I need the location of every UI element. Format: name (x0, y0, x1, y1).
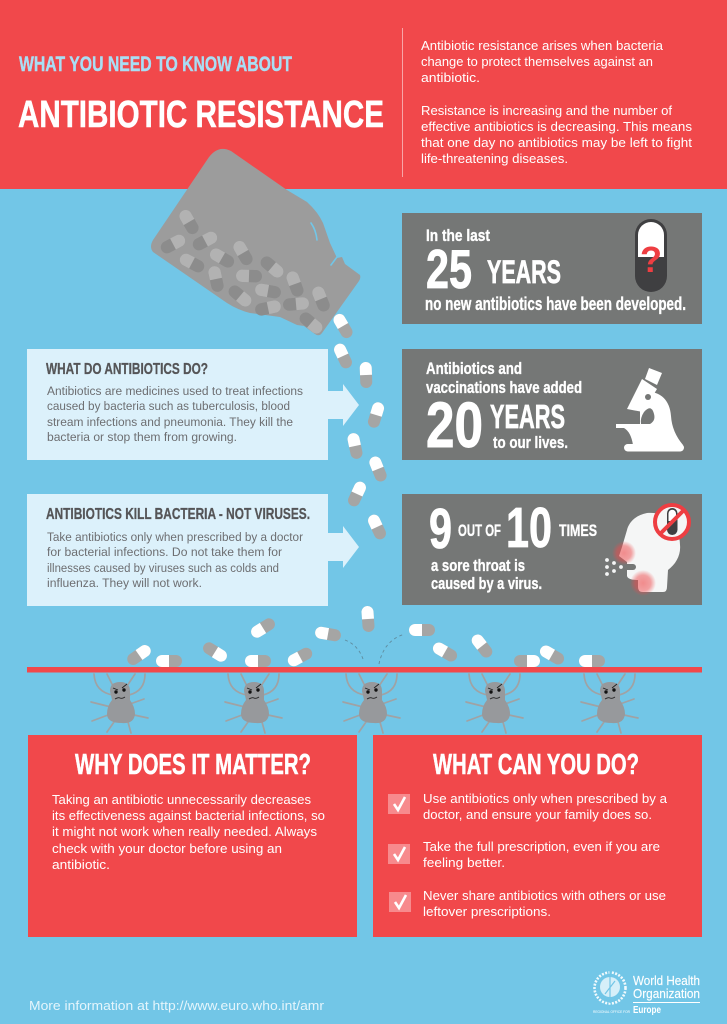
heading: ANTIBIOTICS KILL BACTERIA - NOT VIRUSES. (46, 506, 310, 523)
panel: antibiotics kill bacteria (27, 494, 359, 606)
header intro text (421, 38, 692, 166)
header intro text: antibiotic. (421, 70, 480, 85)
kicker heading: WHAT YOU NEED TO KNOW ABOUT (19, 53, 292, 76)
body text: Antibiotics are medicines used to treat infections (47, 384, 303, 398)
barrier bar (27, 667, 702, 672)
icon: head with sore throat (605, 505, 689, 596)
header intro text: life-threatening diseases. (421, 151, 568, 166)
header band (0, 0, 727, 189)
main title: ANTIBIOTIC RESISTANCE (18, 94, 384, 136)
WHO logo: Organization (633, 986, 700, 1001)
body text: antibiotic. (52, 857, 110, 872)
icon: tipped pill bottle (151, 149, 360, 336)
body text: check with your doctor before using an (52, 841, 282, 856)
number 9: 9 (429, 497, 452, 561)
arrow (328, 526, 359, 568)
panel: why does it matter (28, 735, 357, 937)
number 25: 25 (426, 238, 472, 300)
body text: caused by bacteria such as tuberculosis, blood (47, 399, 290, 413)
header intro text: change to protect themselves against an (421, 54, 653, 69)
checklist item 1: doctor, and ensure your family does so. (423, 807, 652, 822)
body text: its effectiveness against bacterial infections, so (52, 808, 325, 823)
panel: 9 out of 10: caused by a virus. (431, 574, 542, 593)
checklist item 3: leftover prescriptions. (423, 904, 551, 919)
header intro text: Resistance is increasing and the number of (421, 103, 672, 118)
years label: YEARS (487, 254, 561, 290)
WHO logo: Europe (633, 1005, 661, 1016)
bacteria row (91, 674, 638, 733)
checklist item 2 (388, 839, 660, 870)
panel: 20 years: vaccinations have added (426, 378, 582, 397)
checklist item 1 (388, 791, 668, 822)
icon: microscope (616, 368, 684, 452)
header divider (402, 28, 403, 177)
closing lines: a sore throat is (431, 556, 525, 575)
icon: pill with question mark (635, 219, 667, 292)
body text (47, 530, 303, 590)
arrow (328, 384, 359, 426)
header intro text: that one day no antibiotics may be left to fight (421, 135, 692, 150)
panel: 25 years (402, 213, 702, 324)
regional office line: REGIONAL OFFICE FOR (593, 1009, 630, 1014)
header intro text: Antibiotic resistance arises when bacteria (421, 38, 664, 53)
number 10: 10 (506, 496, 552, 560)
panel: what can you do (373, 735, 702, 937)
panel: 20 years (402, 349, 702, 461)
panel: what do antibiotics do (27, 349, 359, 460)
body text: it might not work when really needed. Always (52, 824, 317, 839)
checklist item 3 (389, 888, 666, 919)
emblem (594, 971, 626, 1004)
heading: WHY DOES IT MATTER? (75, 749, 311, 781)
intro line: In the last (426, 226, 490, 245)
checklist item 3: Never share antibiotics with others or use (423, 888, 666, 903)
organisation name: World Health (633, 973, 700, 988)
body text: bacteria or stop them from growing. (47, 430, 237, 444)
header intro text: effective antibiotics is decreasing. This means (421, 119, 692, 134)
body text: Taking an antibiotic unnecessarily decreases (52, 792, 311, 807)
body text (47, 384, 303, 444)
body text (52, 792, 325, 872)
heading: WHAT CAN YOU DO? (433, 749, 639, 781)
bouncing pills (125, 616, 605, 668)
times: TIMES (559, 521, 597, 540)
checklist item 2: Take the full prescription, even if you are (423, 839, 660, 854)
body text: Take antibiotics only when prescribed by a doctor (47, 530, 303, 544)
body text: influenza. They will not work. (47, 576, 202, 590)
closing line: to our lives. (493, 433, 568, 452)
checklist item 2: feeling better. (423, 855, 505, 870)
falling pills (331, 312, 388, 632)
intro lines: Antibiotics and (426, 359, 522, 378)
body text: for bacterial infections. Do not take them for (47, 545, 282, 559)
header title block (18, 53, 384, 136)
years label: YEARS (490, 398, 565, 435)
icon: no pills sign (655, 505, 689, 539)
icon: pill with question mark: ? (640, 239, 662, 280)
out of: OUT OF (458, 521, 501, 540)
body text: stream infections and pneumonia. They kill the (47, 415, 293, 429)
number 20: 20 (426, 389, 483, 461)
panel: 9 out of 10 (402, 494, 702, 605)
WHO logo (593, 971, 700, 1016)
heading: WHAT DO ANTIBIOTICS DO? (46, 361, 208, 378)
body text: illnesses caused by viruses such as colds and (47, 561, 279, 575)
footer link: More information at http://www.euro.who.int/amr (29, 998, 325, 1013)
pill bounce trajectories (345, 634, 405, 664)
checklist item 1: Use antibiotics only when prescribed by a (423, 791, 668, 806)
